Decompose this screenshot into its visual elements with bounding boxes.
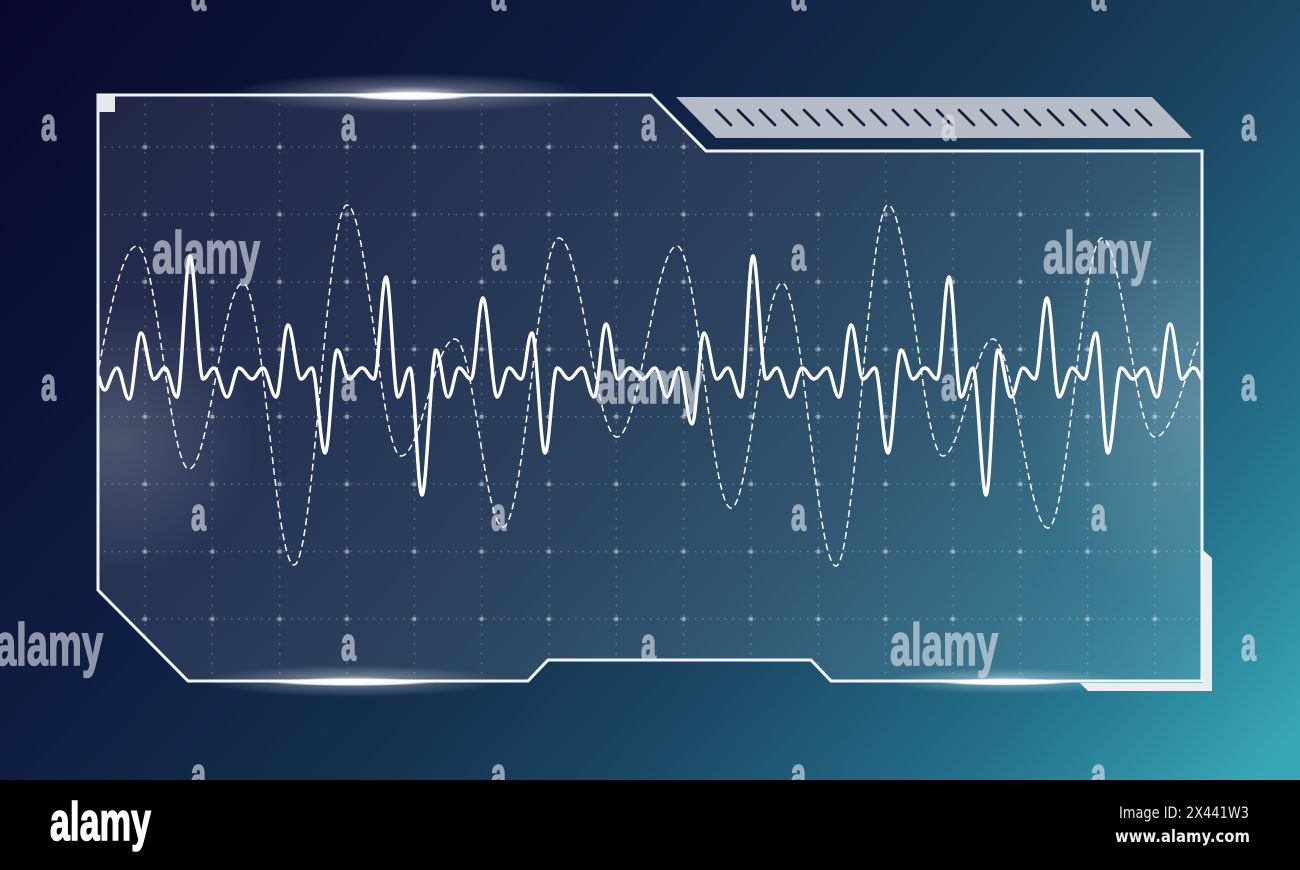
- watermark text: a: [341, 358, 356, 410]
- panel: translucent frame fill: [100, 96, 1200, 680]
- watermark text: a: [941, 358, 956, 410]
- footer image id: Image ID: 2X441W3: [1119, 803, 1249, 822]
- solid waveform: [99, 256, 1201, 495]
- light flare: top: [230, 73, 590, 113]
- watermark text: a: [1241, 98, 1256, 150]
- watermark text: a: [491, 228, 506, 280]
- watermark text: a: [1241, 358, 1256, 410]
- footer url: www.alamy.com: [1115, 827, 1250, 847]
- grid: dotted lines and nodes: [100, 97, 1200, 679]
- corner square: top left: [97, 95, 115, 112]
- watermark text: a: [791, 228, 806, 280]
- watermark text: alamy: [1043, 220, 1151, 286]
- watermark text: a: [191, 488, 206, 540]
- watermark text: a: [341, 618, 356, 670]
- watermark text: a: [791, 488, 806, 540]
- watermark text: alamy: [152, 220, 260, 286]
- watermark text: a: [1091, 748, 1106, 800]
- watermark text: a: [641, 618, 656, 670]
- footer logo: alamy: [50, 792, 151, 852]
- watermark text: alamy: [0, 612, 103, 678]
- frame outline: [98, 95, 1202, 681]
- watermark text: a: [491, 748, 506, 800]
- light flare: bottom right: [885, 668, 1125, 694]
- footer bar: [0, 780, 1300, 870]
- dashed sine waveform: [99, 205, 1198, 566]
- watermark text: a: [791, 748, 806, 800]
- watermark text: alamy: [890, 612, 998, 678]
- header bar with hatch ticks: [676, 97, 1192, 138]
- watermark text: alamy: [595, 350, 703, 416]
- corner bracket: bottom right: [1080, 550, 1212, 691]
- watermark text: a: [191, 748, 206, 800]
- watermark text: a: [1241, 618, 1256, 670]
- watermark text: a: [491, 488, 506, 540]
- watermark text: a: [41, 98, 56, 150]
- watermark text: a: [41, 358, 56, 410]
- watermark text: a: [641, 98, 656, 150]
- light flare: bottom left: [202, 665, 502, 697]
- watermark text: a: [1091, 488, 1106, 540]
- watermark text: a: [941, 98, 956, 150]
- watermark text: a: [341, 98, 356, 150]
